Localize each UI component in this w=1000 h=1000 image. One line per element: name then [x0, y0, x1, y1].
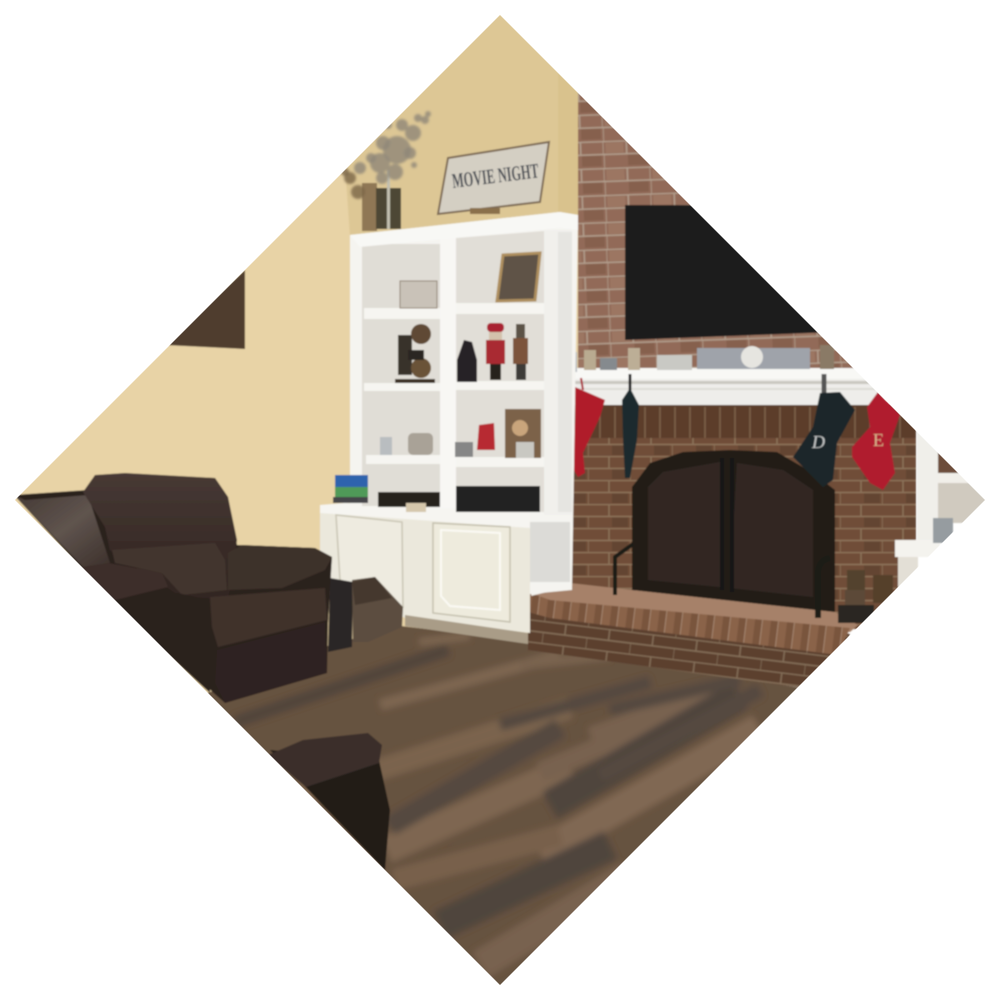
movie night sign: MOVIE NIGHT	[451, 159, 540, 193]
wall return strip	[558, 74, 578, 215]
ottoman	[328, 578, 353, 652]
soldier nutcracker	[513, 324, 528, 380]
dark stocking	[622, 374, 639, 478]
dried flowers	[341, 111, 431, 199]
floor	[208, 625, 798, 985]
framed photo	[497, 253, 540, 301]
right-side panel of bookcase below counter	[530, 522, 570, 582]
items on cabinet	[333, 475, 540, 512]
glass film jar	[400, 281, 437, 308]
candles on hearth	[838, 570, 893, 623]
mantel objects	[563, 345, 834, 372]
fireplace doors	[632, 450, 835, 612]
red stocking with letter: E	[873, 430, 884, 450]
movie night sign	[438, 142, 549, 214]
recliner sofa	[14, 473, 332, 703]
blanket	[352, 577, 403, 642]
fireplace tools	[615, 544, 830, 618]
vase	[362, 170, 401, 231]
black stocking with letter: D	[811, 432, 825, 452]
mantel	[557, 368, 887, 405]
television	[625, 205, 835, 340]
jug	[457, 340, 477, 382]
hearth	[528, 583, 858, 692]
santa nutcracker	[486, 323, 505, 380]
left wall	[15, 168, 579, 693]
bookcase	[350, 212, 578, 594]
upper back wall	[346, 0, 558, 236]
upper brick wall	[578, 80, 908, 380]
framed picture on wall	[165, 270, 245, 349]
lower brick wall	[570, 404, 916, 629]
vintage projector	[395, 324, 435, 383]
right side shelf	[895, 425, 988, 587]
black stocking with letter	[793, 374, 855, 487]
lower shelf items	[380, 409, 541, 458]
red stocking left	[574, 377, 606, 478]
red stocking with letter	[852, 392, 900, 490]
foreground armchair	[268, 733, 390, 870]
cabinet	[320, 503, 570, 644]
